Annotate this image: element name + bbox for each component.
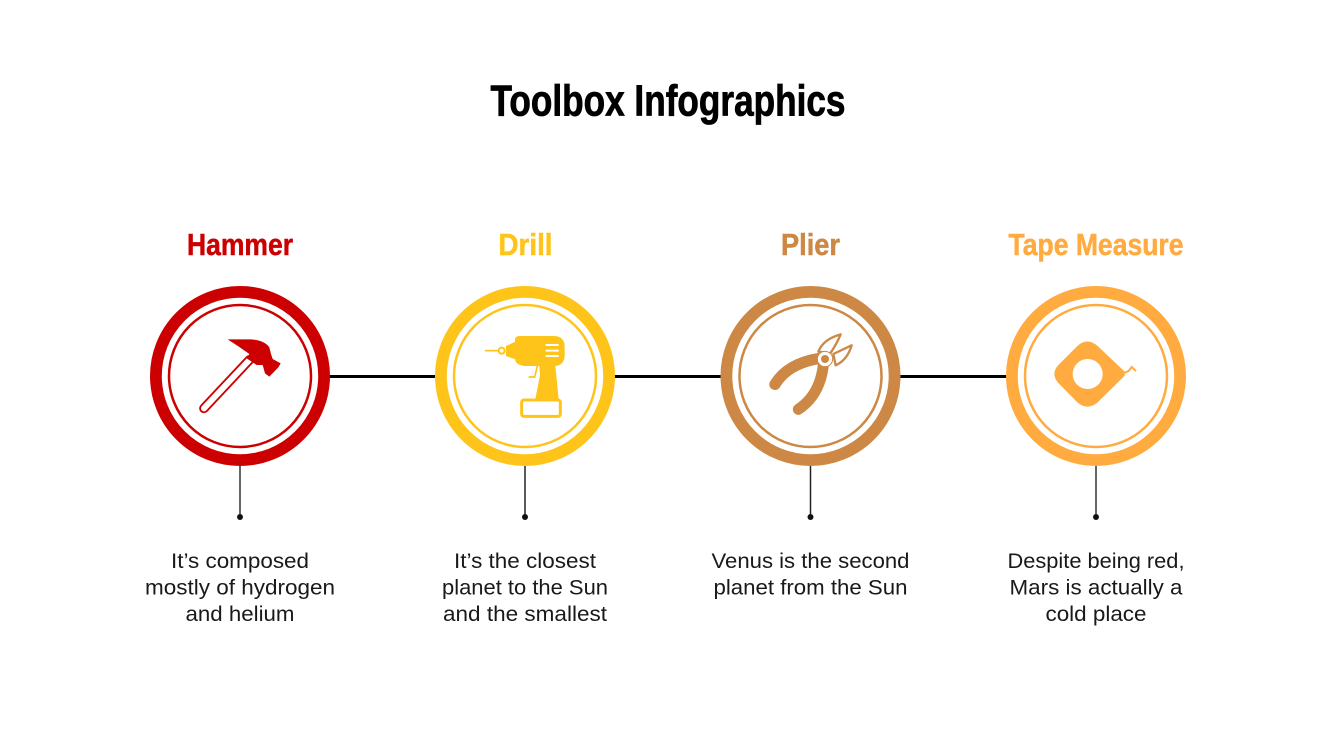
text block: drill xyxy=(442,549,608,626)
text block: plier xyxy=(712,549,910,600)
text block: drill: and the smallest xyxy=(443,602,607,626)
connector stem: drill xyxy=(524,466,526,517)
text block: drill: planet to the Sun xyxy=(442,576,608,600)
icon ring: tape measure xyxy=(1012,292,1180,460)
dot: hammer xyxy=(237,514,243,520)
icon: drill xyxy=(485,336,565,416)
icon: plier xyxy=(775,334,852,409)
text block: plier: planet from the Sun xyxy=(714,576,908,600)
title: Toolbox Infographics xyxy=(490,76,846,126)
icon ring: hammer xyxy=(156,292,324,460)
text block: tape measure: Despite being red, xyxy=(1008,549,1184,573)
dot: tape measure xyxy=(1093,514,1099,520)
text block: drill: It’s the closest xyxy=(454,549,596,573)
icon ring: drill xyxy=(441,292,609,460)
icon: hammer xyxy=(204,339,281,408)
text block: hammer: and helium xyxy=(186,602,294,626)
icon ring: plier xyxy=(726,292,895,460)
panel: hammer xyxy=(145,227,335,626)
heading: plier: Plier xyxy=(781,227,840,262)
panel: plier xyxy=(712,227,910,600)
text block: tape measure: cold place xyxy=(1046,602,1146,626)
dot: plier xyxy=(808,514,814,520)
connector line xyxy=(325,375,1012,378)
heading: tape measure: Tape Measure xyxy=(1008,227,1184,262)
text block: tape measure: Mars is actually a xyxy=(1010,576,1183,600)
dot: drill xyxy=(522,514,528,520)
text block: plier: Venus is the second xyxy=(712,549,910,573)
connector stem: hammer xyxy=(239,466,241,517)
panel: drill xyxy=(441,227,609,626)
heading: hammer: Hammer xyxy=(187,227,293,262)
text block: hammer: It’s composed xyxy=(171,549,309,573)
heading: drill: Drill xyxy=(498,227,552,262)
icon: tape measure xyxy=(1054,341,1136,407)
panel: tape measure xyxy=(1008,227,1184,626)
text block: tape measure xyxy=(1008,549,1184,626)
connector stem: plier xyxy=(810,466,812,517)
text block: hammer xyxy=(145,549,335,626)
connector stem: tape measure xyxy=(1095,466,1097,517)
text block: hammer: mostly of hydrogen xyxy=(145,576,335,600)
